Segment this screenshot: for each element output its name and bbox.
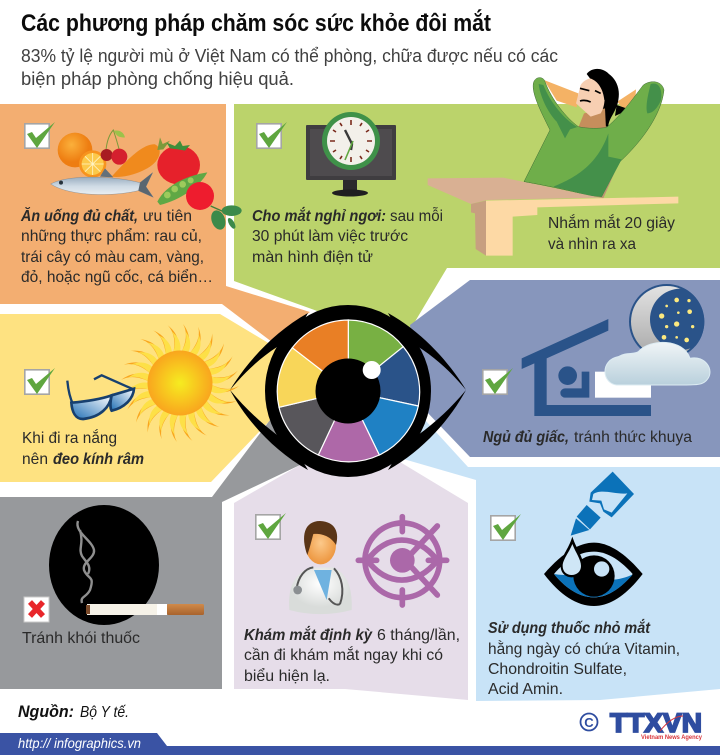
panel: eye checkup [234, 462, 468, 700]
text: eye drops description: hằng ngày có chứa Vitamin, [488, 639, 680, 658]
text: nutrition description: những thực phẩm: rau củ, [21, 227, 202, 245]
eye corners [230, 313, 466, 470]
subtitle: biện pháp phòng chống hiệu quả. [21, 68, 294, 89]
text: sunglasses advice: nên [22, 451, 48, 468]
logo: TTXVN [580, 708, 702, 741]
pupil [316, 358, 380, 424]
illustration: fruit, vegetables and fish [51, 130, 242, 232]
panel: eye drops [400, 420, 720, 701]
agency tagline: Vietnam News Agency [641, 734, 702, 741]
text: nutrition description: đỏ, hoặc ngũ cốc, cá biển… [21, 268, 213, 286]
panel: rest eyes [234, 69, 720, 330]
text: eye checkup description: biểu hiện lạ. [244, 667, 330, 685]
text: sleep advice: Ngủ đủ giấc, [483, 429, 569, 446]
pupil highlight [363, 361, 381, 379]
icon: smoke [77, 521, 94, 603]
text: eye drops description: Acid Amin. [488, 681, 563, 698]
icon: checkbox [491, 514, 521, 540]
icon: cloud [605, 342, 710, 385]
icon: doctor [289, 521, 352, 614]
icon: dropper bottle [571, 472, 634, 536]
text: eye drops description: Chondroitin Sulfate, [488, 661, 627, 678]
text: eye checkup description: Khám mắt định kỳ [244, 625, 373, 644]
icon: house with sleeping person [522, 319, 651, 416]
central eye graphic [230, 305, 466, 477]
icon: cigarette [86, 604, 204, 615]
text: rest eyes description: sau mỗi [390, 206, 443, 225]
wordmark: TTXVN [610, 708, 702, 738]
text: eye checkup description [244, 625, 460, 685]
text: eye checkup description: 6 tháng/lần, [377, 627, 460, 644]
text: close eyes caption [548, 213, 675, 253]
text: rest eyes description: màn hình điện tử [252, 249, 373, 266]
footer url: http:// infographics.vn [18, 735, 141, 751]
icon: eye with drop [544, 537, 643, 606]
icon: checkbox [25, 368, 55, 394]
text: close eyes caption: Nhắm mắt 20 giây [548, 213, 675, 232]
subtitle: 83% tỷ lệ người mù ở Việt Nam có thể phòng, chữa được nếu có các [21, 45, 558, 66]
text: sunglasses advice: Khi đi ra nắng [22, 428, 117, 447]
text: sleep advice: tránh thức khuya [574, 429, 692, 446]
source [18, 702, 129, 721]
subtitle [21, 45, 558, 89]
text: rest eyes description: 30 phút làm việc trước [252, 228, 408, 245]
text: avoid smoke label: Tránh khói thuốc [22, 630, 140, 647]
source: Bộ Y tế. [80, 704, 129, 721]
copyright mark: C [584, 715, 594, 730]
text: sleep advice [483, 429, 692, 446]
panel: sleep [410, 280, 720, 457]
footer bar [0, 733, 720, 755]
icon: monitor with clock [306, 112, 396, 196]
text: rest eyes description: Cho mắt nghỉ ngơi: [252, 206, 386, 225]
text: rest eyes description [252, 206, 443, 266]
panel: nutrition [0, 104, 310, 342]
text: nutrition description: trái cây có màu cam, vàng, [21, 249, 204, 266]
source: Nguồn: [18, 702, 74, 721]
text: nutrition description [20, 206, 213, 286]
icon: black circle with smoke [49, 505, 159, 625]
text: eye drops description [488, 618, 680, 698]
icon: checkbox [25, 122, 55, 148]
icon: sunglasses [67, 375, 134, 419]
icon: red cross [24, 597, 49, 622]
text: nutrition description: Ăn uống đủ chất, [20, 206, 138, 225]
text: sunglasses advice: đeo kính râm [53, 451, 144, 468]
icon: checkbox [256, 513, 286, 539]
text: eye checkup description: cần đi khám mắt ngay khi có [244, 645, 443, 664]
globe swoosh [660, 716, 683, 731]
icon: purple eye target [358, 517, 447, 605]
icon: checkbox [257, 122, 287, 148]
icon: sun [121, 324, 239, 442]
icon: moon and stars [629, 284, 704, 353]
text: nutrition description: ưu tiên [143, 208, 192, 225]
text: eye drops description: Sử dụng thuốc nhỏ mắt [488, 618, 651, 637]
text: close eyes caption: và nhìn ra xa [548, 236, 636, 253]
illustration: man relaxing at desk [428, 69, 678, 256]
panel: avoid smoke [0, 420, 300, 689]
eye outer ring [265, 305, 431, 477]
text: sunglasses advice [22, 428, 144, 468]
title: Các phương pháp chăm sóc sức khỏe đôi mắt [21, 9, 491, 37]
panel: sunglasses [0, 314, 280, 482]
iris segments [277, 320, 420, 462]
icon: checkbox [483, 368, 513, 394]
